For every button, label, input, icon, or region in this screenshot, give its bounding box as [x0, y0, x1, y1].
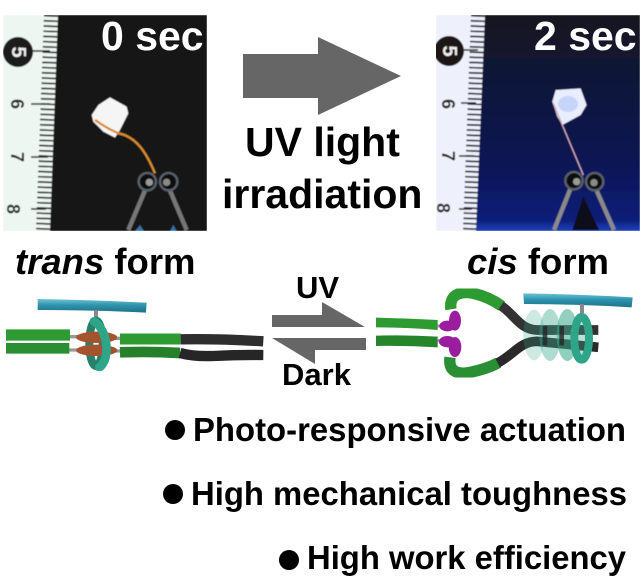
heading: UV light irradiation: UV light: [245, 119, 400, 165]
diagram: trans form molecule: [6, 299, 263, 367]
ring front: [94, 321, 106, 367]
black chains: [181, 339, 263, 341]
solid ring: [574, 317, 589, 360]
photo: 0 sec: [3, 13, 207, 231]
stripes visible through rings: [545, 326, 573, 345]
photo: 2 sec: 7: [438, 151, 458, 161]
heading: UV light irradiation: irradiation: [222, 171, 422, 217]
arrow: UV irradiation: [243, 37, 401, 115]
heading: cis form: cis form: [467, 241, 609, 282]
label: 0 sec: 0 sec: [101, 13, 204, 59]
translucent rings: [523, 310, 545, 360]
photo: 2 sec: [433, 13, 640, 231]
axle: teal bar: [523, 293, 633, 307]
azobenzene units: [76, 332, 117, 343]
heading: trans form: trans form: [15, 241, 196, 282]
bullet: high mechanical toughness: High mechanical toughness: [191, 475, 627, 512]
bullet: high work efficiency: High work efficiency: [307, 539, 627, 576]
diagram: cis form molecule: [376, 293, 633, 373]
photo: 0 sec: 5: [7, 46, 29, 58]
photo: 2 sec: 5: [438, 45, 460, 57]
bullet: photo-responsive actuation: Photo-responsive actuation: [193, 411, 626, 448]
photo: 0 sec: 6: [7, 99, 27, 109]
label: UV: UV: [296, 270, 339, 305]
upper arm: [451, 293, 502, 309]
green chains: [6, 329, 70, 341]
label: Dark: Dark: [282, 357, 352, 392]
magenta units: [439, 311, 461, 357]
ring back: [89, 321, 103, 366]
lower arm: [450, 357, 498, 373]
photo: 2 sec: 6: [438, 99, 458, 109]
photo: 2 sec: 8: [433, 203, 453, 213]
green stubs: [376, 318, 438, 330]
label: 2 sec: 2 sec: [534, 13, 637, 59]
heading: UV light irradiation: [222, 119, 422, 217]
photo: 0 sec: 7: [7, 152, 27, 162]
equilibrium arrow: UV forward: [272, 302, 365, 327]
photo: 0 sec: 8: [3, 204, 23, 214]
feature list: [163, 411, 627, 576]
equilibrium arrow: dark reverse: [272, 338, 366, 364]
axle: teal bar: [38, 299, 147, 313]
